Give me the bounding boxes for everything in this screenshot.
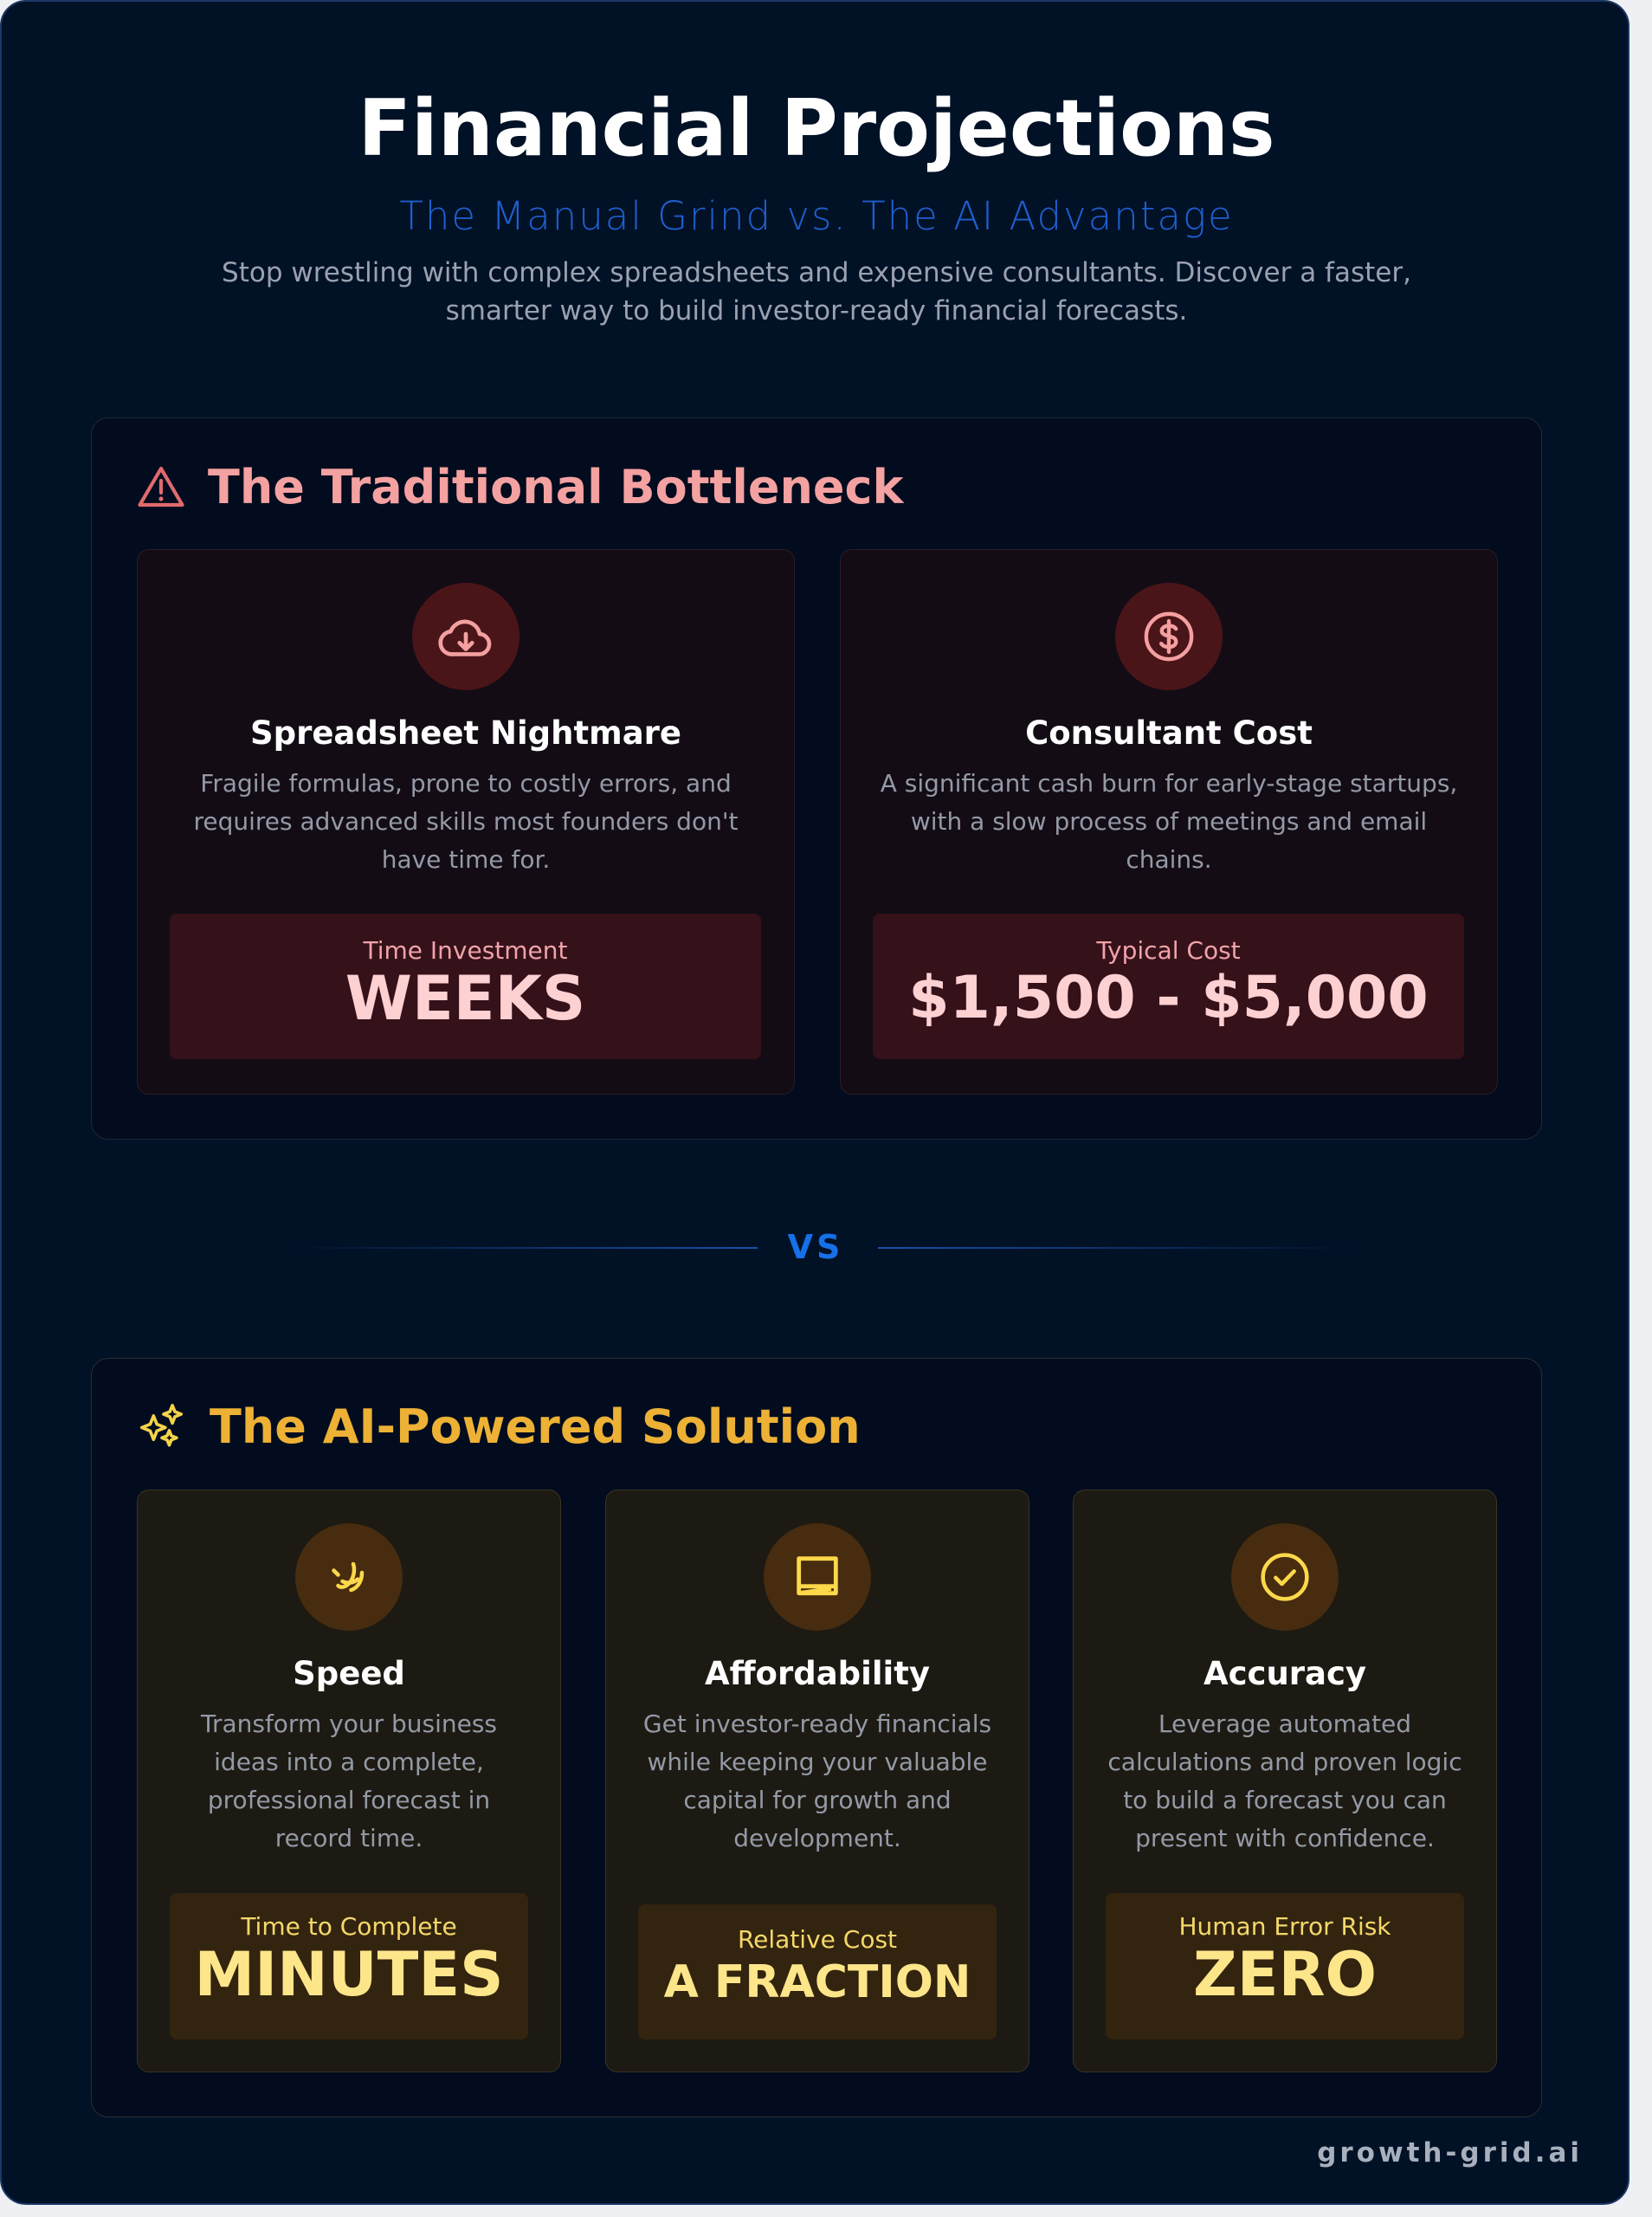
card: consultant cost <box>840 549 1498 1095</box>
icon: cloud download <box>412 583 519 690</box>
card text: Transform your business ideas into a complete, professional forecast in record time. <box>201 1710 497 1852</box>
heading: traditional: The Traditional Bottleneck <box>208 459 903 514</box>
subtitle: The Manual Grind vs. The AI Advantage <box>399 193 1234 239</box>
card text: Fragile formulas, prone to costly errors, and requires advanced skills most founders don't have time for. <box>193 769 739 874</box>
stat: human error risk <box>1106 1893 1464 2039</box>
icon: dollar <box>1115 583 1223 690</box>
card title: Spreadsheet Nightmare <box>250 714 681 752</box>
card title: Accuracy <box>1204 1655 1366 1692</box>
card text: Get investor-ready financials while keeping your valuable capital for growth and development. <box>643 1710 991 1852</box>
stat: time to complete: MINUTES <box>194 1939 504 2010</box>
icon: monitor <box>764 1523 871 1631</box>
stat: relative cost: Relative Cost <box>738 1925 897 1954</box>
card title: Affordability <box>705 1655 930 1692</box>
icon: warning <box>138 466 184 507</box>
stat: typical cost: $1,500 - $5,000 <box>908 964 1429 1032</box>
card: accuracy <box>1073 1490 1497 2072</box>
card: affordability <box>605 1490 1029 2072</box>
card title: Speed <box>293 1655 405 1692</box>
panel: ai solution <box>91 1358 1542 2117</box>
stat: time to complete <box>170 1893 528 2039</box>
card title: Consultant Cost <box>1025 714 1313 752</box>
stat: human error risk: ZERO <box>1193 1939 1377 2010</box>
stat: time investment <box>170 914 761 1059</box>
intro text: Stop wrestling with complex spreadsheets and expensive consultants. Discover a faster, smarter way to build investor-ready financial forecasts. <box>222 257 1411 326</box>
stat: time to complete: Time to Complete <box>241 1912 457 1941</box>
stat: human error risk: Human Error Risk <box>1178 1912 1391 1941</box>
stat: relative cost <box>638 1904 997 2039</box>
card: spreadsheet nightmare <box>137 549 795 1095</box>
stat: time investment: Time Investment <box>363 936 568 965</box>
card text: Leverage automated calculations and proven logic to build a forecast you can present with confidence. <box>1107 1710 1462 1852</box>
panel: traditional bottleneck <box>91 417 1542 1140</box>
icon: sparkles <box>140 1404 184 1447</box>
stat: typical cost <box>873 914 1464 1059</box>
icon: speed <box>295 1523 403 1631</box>
vs divider: VS <box>788 1228 843 1266</box>
stat: time investment: WEEKS <box>345 963 585 1034</box>
stat: typical cost: Typical Cost <box>1096 936 1241 965</box>
heading: ai: The AI-Powered Solution <box>210 1399 861 1453</box>
card: speed <box>137 1490 561 2072</box>
icon: check <box>1231 1523 1339 1631</box>
title: Financial Projections <box>358 83 1275 174</box>
stat: relative cost: A FRACTION <box>664 1956 971 2008</box>
footer brand: growth-grid.ai <box>1317 2137 1583 2169</box>
card text: A significant cash burn for early-stage startups, with a slow process of meetings and email chains. <box>881 769 1457 874</box>
